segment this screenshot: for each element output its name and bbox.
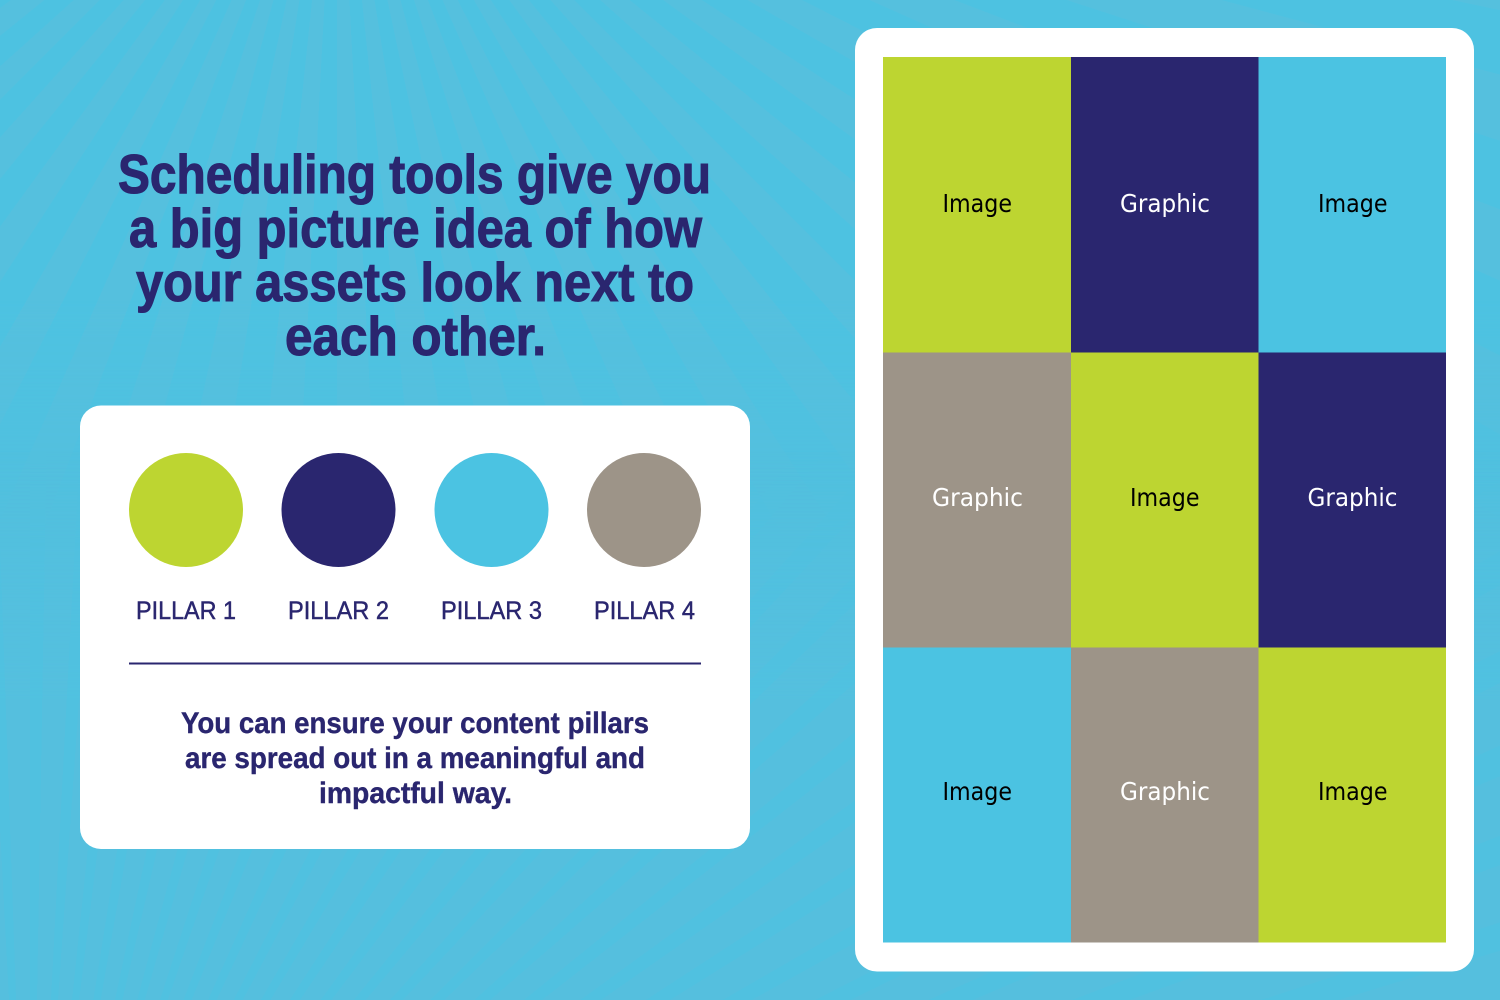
grid cell: row 1 column 1 image <box>883 57 1071 352</box>
legend item: pillar 3 <box>434 453 548 625</box>
title: each other. <box>285 305 546 367</box>
grid cell: row 3 column 2 graphic <box>1071 648 1258 942</box>
grid cell: row 3 column 3 image <box>1258 648 1446 942</box>
grid cell: row 2 column 3 graphic <box>1258 352 1446 648</box>
grid cell: row 1 column 3 image: Image <box>1318 189 1388 218</box>
panel: content pillars legend <box>80 406 750 849</box>
title: Scheduling tools give you <box>118 143 711 205</box>
grid cell: row 2 column 3 graphic: Graphic <box>1308 483 1398 512</box>
legend item: pillar 4: PILLAR 4 <box>594 597 695 625</box>
grid cell: row 1 column 2 graphic <box>1071 57 1258 352</box>
grid cell: row 3 column 1 image: Image <box>942 777 1012 806</box>
title <box>118 143 711 367</box>
legend item: pillar 3: PILLAR 3 <box>441 597 542 625</box>
legend item: pillar 4 <box>587 453 701 625</box>
title: a big picture idea of how <box>129 197 702 259</box>
grid cell: row 2 column 2 image <box>1071 352 1258 648</box>
grid cell: row 2 column 1 graphic <box>883 352 1071 648</box>
grid cell: row 1 column 3 image <box>1258 57 1446 352</box>
legend item: pillar 2: PILLAR 2 <box>288 597 389 625</box>
title: your assets look next to <box>136 251 694 313</box>
panel description text: You can ensure your content pillars <box>181 707 649 740</box>
legend item: pillar 1 <box>129 453 243 625</box>
legend item: pillar 1: PILLAR 1 <box>136 597 236 625</box>
grid cell: row 2 column 1 graphic: Graphic <box>932 483 1023 512</box>
grid cell: row 1 column 1 image: Image <box>942 189 1012 218</box>
grid cell: row 2 column 2 image: Image <box>1130 483 1200 512</box>
grid cell: row 3 column 2 graphic: Graphic <box>1120 777 1210 806</box>
panel: content schedule grid <box>855 28 1474 972</box>
panel description text: are spread out in a meaningful and <box>185 742 645 775</box>
grid cell: row 3 column 3 image: Image <box>1318 777 1388 806</box>
grid cell: row 3 column 1 image <box>883 648 1071 942</box>
panel description text <box>181 707 649 810</box>
legend item: pillar 2 <box>282 453 396 625</box>
panel description text: impactful way. <box>319 777 512 810</box>
grid cell: row 1 column 2 graphic: Graphic <box>1120 189 1210 218</box>
